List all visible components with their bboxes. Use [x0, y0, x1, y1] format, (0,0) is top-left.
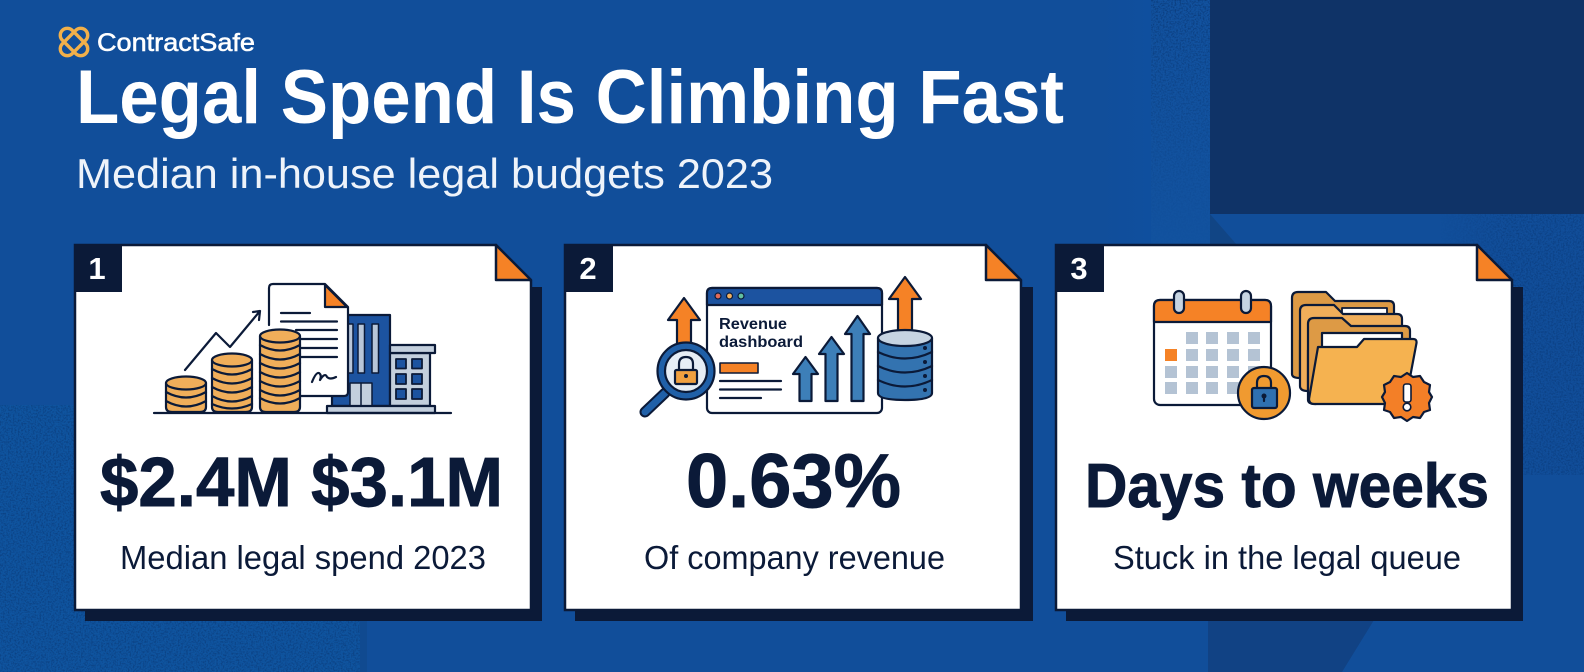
building	[332, 315, 390, 406]
number badge 2: 2	[579, 251, 597, 286]
icon: interlocked logo mark	[57, 25, 91, 59]
number badge 1: 1	[88, 251, 106, 286]
icon: revenue dashboard, magnifier and database	[645, 277, 932, 413]
orange arrow right	[889, 277, 921, 332]
panel: card 2 share of revenue	[564, 244, 1033, 621]
lock badge	[1238, 367, 1290, 419]
front folder	[1309, 339, 1417, 404]
dashboard label: Revenue	[719, 316, 787, 333]
icon: coins, contract and office building	[154, 284, 451, 413]
calendar day grid	[1165, 332, 1260, 394]
magnifier with lock	[645, 342, 714, 412]
logo wordmark: ContractSafe	[97, 29, 255, 57]
orange arrow left	[668, 298, 700, 345]
database	[878, 330, 932, 400]
dashboard label	[719, 316, 803, 351]
stat label: Of company revenue	[644, 539, 945, 576]
coin stack medium	[212, 354, 252, 412]
dashboard label: dashboard	[719, 334, 803, 351]
coin stack tall	[260, 330, 300, 412]
coin stack small	[166, 376, 206, 412]
ground line	[154, 412, 451, 414]
number badge 2	[564, 244, 613, 292]
number badge 1	[74, 244, 122, 292]
dashboard window	[707, 288, 882, 413]
stat value: Days to weeks	[1085, 452, 1489, 521]
panel: card 1 median legal spend	[74, 244, 542, 621]
alert badge	[1382, 373, 1432, 421]
stat label: Median legal spend 2023	[120, 539, 486, 576]
icon: calendar with lock and folders with alert	[1154, 291, 1432, 421]
contract document	[269, 284, 348, 396]
growth arrow	[185, 311, 260, 370]
stat value: $2.4M $3.1M	[100, 443, 503, 521]
title: Legal Spend Is Climbing Fast	[76, 55, 1064, 140]
stat value: 0.63%	[686, 439, 901, 524]
number badge 3: 3	[1070, 251, 1088, 286]
stat label: Stuck in the legal queue	[1113, 539, 1461, 576]
logo	[57, 25, 255, 59]
third folder	[1308, 318, 1410, 404]
back folder	[1292, 292, 1394, 378]
middle folder	[1300, 305, 1402, 391]
subtitle: Median in-house legal budgets 2023	[76, 150, 773, 197]
number badge 3	[1055, 244, 1104, 292]
blue rising arrows	[793, 316, 870, 401]
calendar	[1154, 300, 1271, 405]
panel: card 3 legal queue	[1055, 244, 1523, 621]
